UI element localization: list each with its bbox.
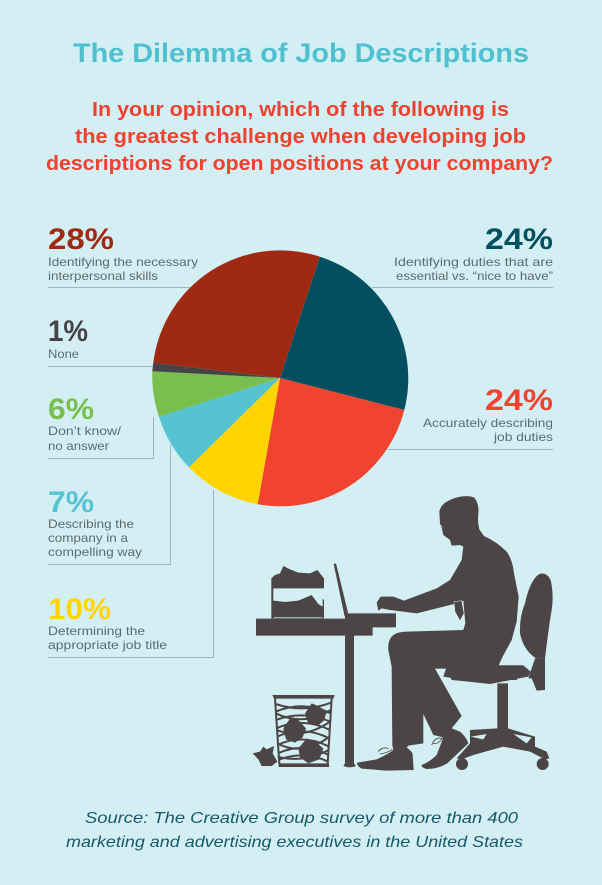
slice: 6% don't know <box>152 371 280 417</box>
label: 28% <box>48 223 198 283</box>
pie chart <box>152 250 408 506</box>
crumpled paper on floor <box>253 746 277 766</box>
label: 1% <box>48 315 88 361</box>
survey question: descriptions for open positions at your company? <box>46 152 553 175</box>
slice: 24% essential duties <box>280 257 408 410</box>
label: 7%: 7% <box>48 486 94 519</box>
label: 7%: company in a <box>48 531 128 545</box>
wastebasket <box>272 695 335 767</box>
label: 10% <box>48 593 167 652</box>
survey question: In your opinion, which of the following is <box>92 98 509 121</box>
slice: 28% interpersonal skills <box>153 250 320 378</box>
tie <box>454 601 464 621</box>
label: 7% <box>48 486 142 559</box>
label: 6%: 6% <box>48 393 94 426</box>
label: 10%: Determining the <box>48 624 145 638</box>
glasses <box>438 525 442 529</box>
slice: 1% none <box>152 363 280 378</box>
label: 7%: compelling way <box>48 545 142 559</box>
label: 24% essential duties: 24% <box>485 223 553 256</box>
label: 24% describing duties: 24% <box>485 384 553 417</box>
label: 24% essential duties: Identifying duties that are <box>394 255 553 269</box>
label: 1%: None <box>48 347 79 361</box>
label: 6% <box>48 393 122 453</box>
illustration: person at desk <box>253 496 553 771</box>
source note: marketing and advertising executives in the United States <box>66 834 523 851</box>
label: 28%: Identifying the necessary <box>48 255 198 269</box>
person <box>357 496 523 771</box>
source note: Source: The Creative Group survey of more than 400 <box>85 810 518 827</box>
desk <box>256 613 396 767</box>
laptop screen <box>334 563 348 617</box>
title: The Dilemma of Job Descriptions <box>73 38 529 68</box>
label: 10%: appropriate job title <box>48 638 167 652</box>
source note <box>66 810 523 851</box>
label: 24% essential duties: essential vs. “nice to have” <box>396 269 553 283</box>
label: 24% describing duties <box>423 384 553 444</box>
office chair <box>447 573 553 770</box>
shoelaces <box>378 737 443 754</box>
label: 1%: 1% <box>48 315 88 348</box>
label: 24% describing duties: job duties <box>493 430 553 444</box>
survey question: the greatest challenge when developing job <box>75 125 526 148</box>
label: 6%: Don’t know/ <box>48 424 122 438</box>
label: 24% describing duties: Accurately describing <box>423 416 553 430</box>
survey question <box>46 98 553 175</box>
label: 28%: 28% <box>48 223 114 256</box>
slice: 10% job title <box>189 378 280 504</box>
slice: 7% describing company <box>159 378 280 467</box>
label: 24% essential duties <box>394 223 553 283</box>
crumpled paper <box>305 703 327 726</box>
label: 6%: no answer <box>48 439 109 453</box>
label: 7%: Describing the <box>48 517 134 531</box>
label: 10%: 10% <box>48 593 111 626</box>
leader lines <box>48 288 553 658</box>
document tray <box>271 566 324 618</box>
label: 28%: interpersonal skills <box>48 269 158 283</box>
slice: 24% describing duties <box>258 378 404 506</box>
